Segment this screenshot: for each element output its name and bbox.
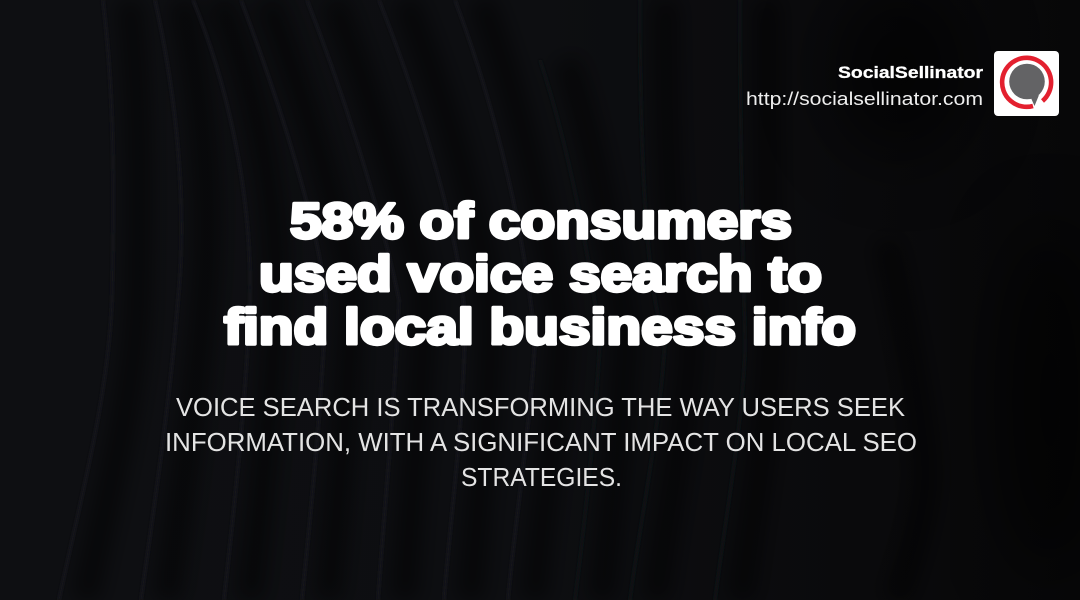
subtitle text block: INFORMATION, WITH A SIGNIFICANT IMPACT ON LOCAL SEO [165,427,917,457]
subtitle text block: VOICE SEARCH IS TRANSFORMING THE WAY USERS SEEK [176,392,906,422]
icon: SocialSellinator logo [994,51,1059,116]
title [224,193,856,355]
brand url: http://socialsellinator.com [746,89,983,109]
title: find local business info [224,299,856,355]
brand header [746,51,1059,116]
title: 58% of consumers [290,193,792,249]
title: used voice search to [259,246,822,302]
brand name: SocialSellinator [838,63,983,82]
subtitle text block: STRATEGIES. [461,462,622,492]
subtitle text block [165,392,917,492]
